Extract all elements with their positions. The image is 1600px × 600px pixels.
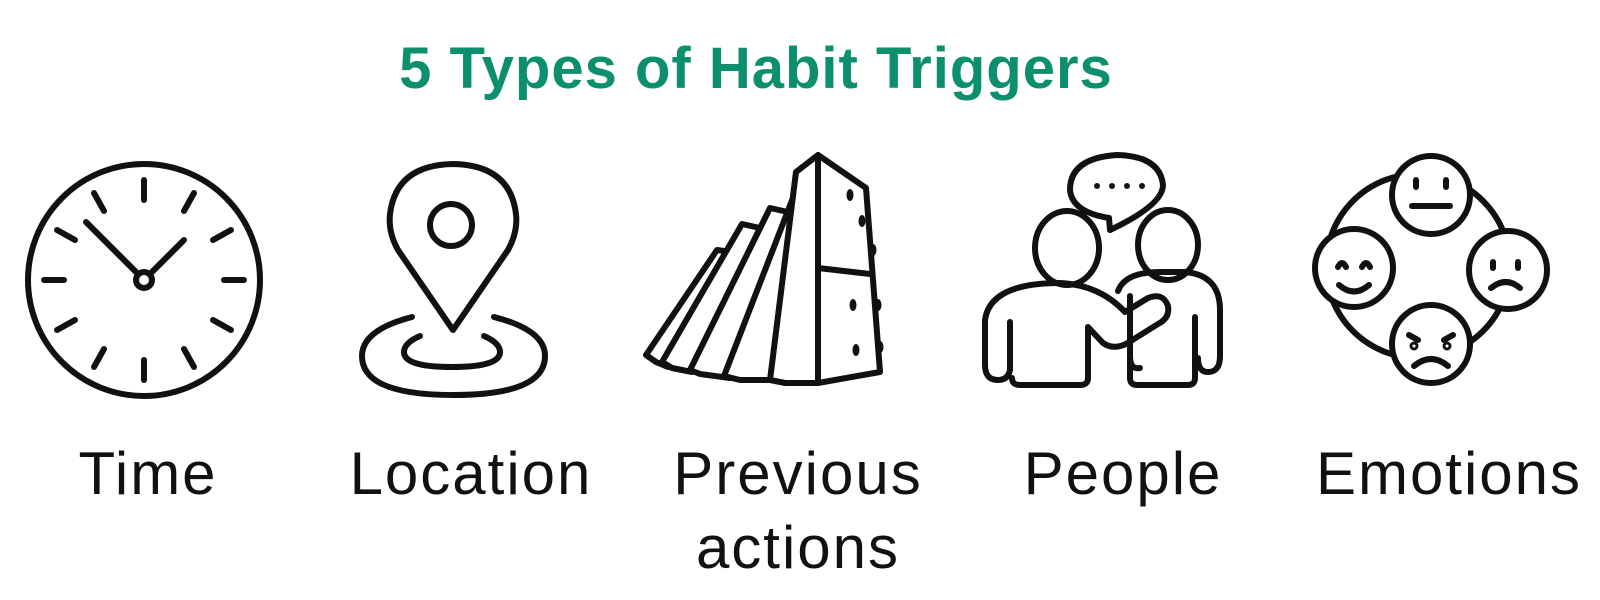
label: Previous actions: Previous	[673, 440, 923, 507]
icon: dominoes	[646, 155, 884, 383]
icon: emotions	[1315, 156, 1547, 383]
label: People: People	[1024, 440, 1222, 507]
label: Previous actions: actions	[696, 514, 900, 581]
icon: people	[985, 155, 1220, 385]
label: Previous actions	[673, 440, 923, 581]
label: Emotions: Emotions	[1316, 440, 1582, 507]
icon: clock	[28, 164, 260, 396]
title: 5 Types of Habit Triggers	[399, 36, 1113, 101]
label: Location: Location	[350, 440, 592, 507]
icon: location pin	[362, 164, 545, 395]
label: Time: Time	[78, 440, 218, 507]
